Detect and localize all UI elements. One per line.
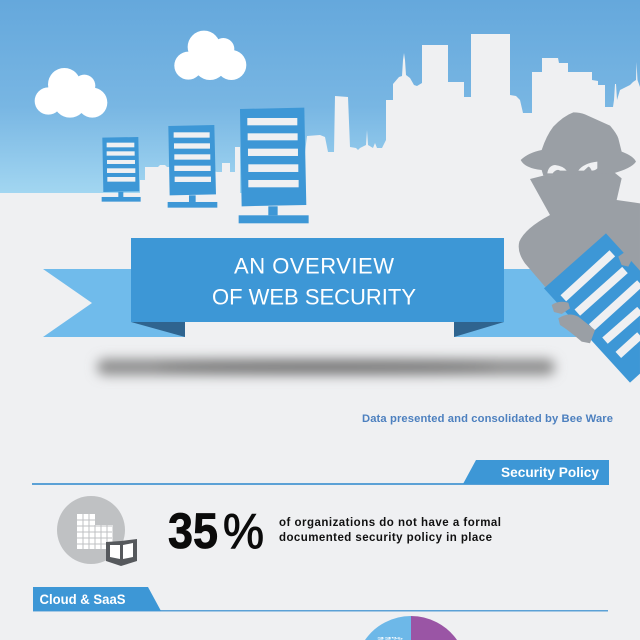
section header: Security Policy <box>32 460 609 485</box>
sky <box>0 0 640 193</box>
ribbon folds <box>131 322 504 337</box>
stolen server <box>544 233 640 383</box>
ribbon shadow <box>97 359 555 375</box>
title: OF WEB SECURITY <box>212 284 416 310</box>
icon: large server <box>239 108 309 223</box>
server slots <box>563 253 640 355</box>
title: AN OVERVIEW <box>234 254 394 278</box>
section header: Cloud & SaaS: Cloud & SaaS <box>40 592 126 607</box>
statistic description: documented security policy in place <box>279 532 492 544</box>
credit line: Data presented and consolidated by Bee Ware <box>362 413 613 425</box>
statistic description <box>279 517 501 544</box>
statistic: 35%: % <box>223 505 264 559</box>
statistic description: of organizations do not have a formal <box>279 517 501 529</box>
section header: Cloud & SaaS <box>33 587 608 612</box>
building <box>77 514 112 549</box>
icon: medium server <box>168 125 217 208</box>
icon: building and policy book <box>57 496 137 566</box>
ribbon back tails <box>43 269 600 337</box>
statistic: 35% <box>168 503 264 559</box>
city skyline <box>140 34 640 193</box>
title <box>212 254 416 310</box>
pie chart <box>365 616 457 640</box>
cloud: left <box>35 68 107 118</box>
ribbon title banner <box>131 238 504 322</box>
book <box>106 539 137 566</box>
eyes <box>547 162 597 173</box>
section header: Security Policy: Security Policy <box>501 465 599 480</box>
hacker body and coat <box>519 172 640 313</box>
cloud: right <box>174 31 246 80</box>
gloved hands <box>552 253 632 343</box>
statistic: 35%: 35 <box>168 503 218 559</box>
hat <box>521 112 636 176</box>
hacker figure holding a server <box>519 112 640 383</box>
icon: small server <box>102 137 141 202</box>
